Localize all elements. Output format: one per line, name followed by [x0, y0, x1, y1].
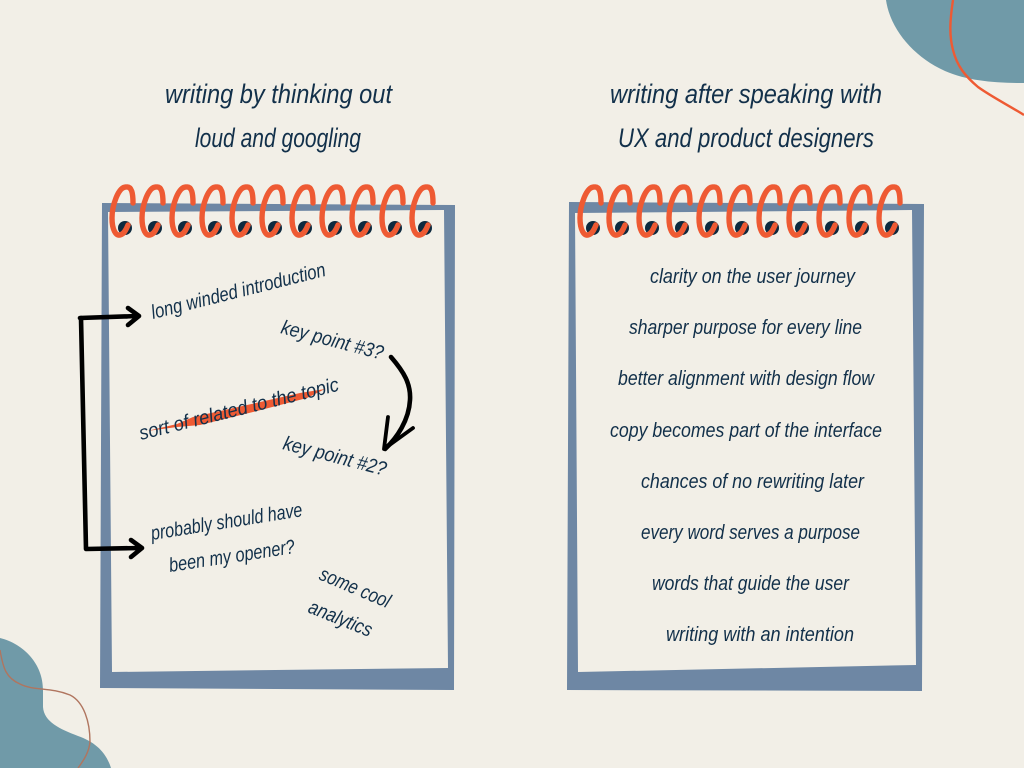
note: key point 2: key point #2? [281, 433, 390, 481]
spiral binding: right [580, 187, 900, 235]
note: some cool analytics: some cool [316, 563, 394, 613]
list: benefits of speaking with designers: copy becomes part of the interface [610, 420, 882, 442]
strike-through brush mark [147, 389, 325, 431]
note: key point 3: key point #3? [279, 317, 387, 365]
notebook frame: right [567, 202, 924, 691]
arrow: curved from key point 3 to key point 2 [384, 357, 413, 449]
note: some cool analytics: analytics [305, 596, 375, 642]
note: probably should have been my opener: been my opener? [167, 536, 297, 577]
notebook frame: left [100, 203, 455, 690]
note: some cool analytics [305, 563, 394, 642]
list: benefits of speaking with designers: writing with an intention [666, 624, 854, 646]
heading: right notebook title: UX and product designers [618, 123, 874, 153]
note: sort of related to the topic: sort of related to the topic [137, 374, 341, 445]
heading: left notebook title: writing by thinking out [165, 79, 393, 109]
list: benefits of speaking with designers: better alignment with design flow [618, 368, 875, 390]
heading: left notebook title: loud and googling [195, 123, 361, 153]
list: benefits of speaking with designers: words that guide the user [652, 573, 850, 595]
list: benefits of speaking with designers [610, 266, 882, 646]
list: benefits of speaking with designers: chances of no rewriting later [641, 471, 865, 493]
list: benefits of speaking with designers: every word serves a purpose [641, 522, 860, 544]
heading: left notebook title [165, 79, 393, 153]
decorative blob: bottom left [0, 638, 111, 768]
note: long winded introduction: long winded introduction [149, 259, 328, 324]
note: probably should have been my opener: probably should have [149, 499, 304, 545]
list: benefits of speaking with designers: clarity on the user journey [650, 266, 856, 288]
arrow: bracket linking the opener to the introduction [80, 308, 142, 557]
heading: right notebook title: writing after speaking with [610, 79, 882, 109]
panel: left notebook [80, 187, 455, 690]
heading: right notebook title [610, 79, 882, 153]
note: probably should have been my opener [149, 499, 304, 577]
spiral binding: left [112, 187, 433, 235]
list: benefits of speaking with designers: sharper purpose for every line [629, 317, 862, 339]
panel: right notebook [567, 187, 924, 691]
decorative blob: top right [886, 0, 1024, 115]
